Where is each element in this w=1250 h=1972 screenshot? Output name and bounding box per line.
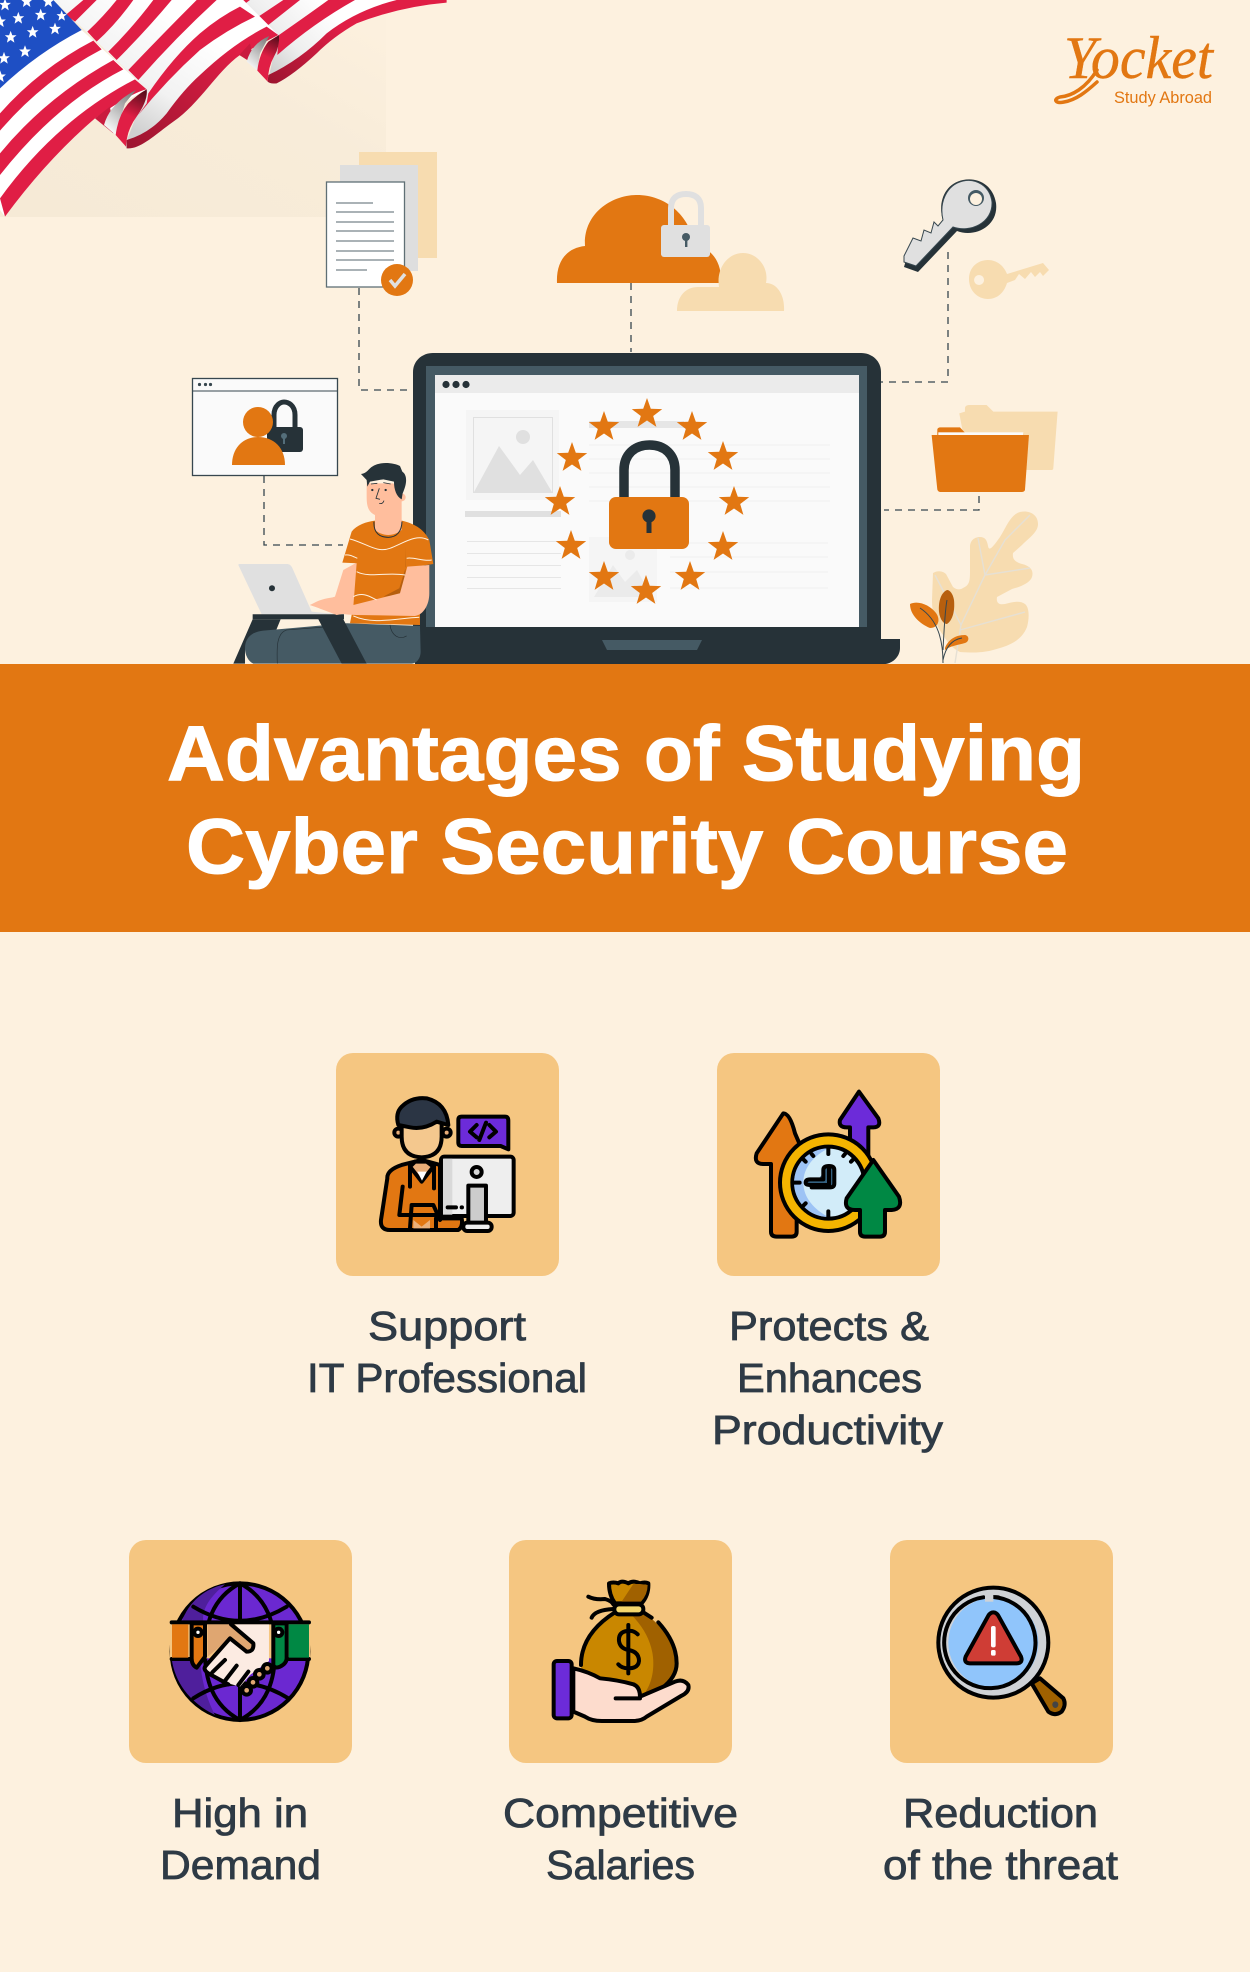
panel: reduction of the threat xyxy=(883,1540,1119,1888)
label: Reduction xyxy=(903,1790,1098,1836)
person with small laptop xyxy=(233,463,433,664)
label: Competitive xyxy=(503,1790,738,1836)
title: Advantages of Studying xyxy=(167,709,1085,797)
label xyxy=(712,1303,944,1453)
icon: key xyxy=(904,179,996,272)
icon: developer at computer xyxy=(381,1098,514,1231)
panel: support IT professional xyxy=(307,1053,587,1401)
connector dashed lines xyxy=(264,252,979,545)
first section xyxy=(0,30,147,217)
label: Demand xyxy=(160,1842,321,1888)
first curl xyxy=(95,107,113,133)
padlock xyxy=(609,445,689,549)
icon: magnifier with warning xyxy=(938,1588,1065,1714)
third section xyxy=(240,0,447,83)
label: Protects & xyxy=(729,1303,929,1349)
laptop with lock and stars xyxy=(413,353,900,664)
second curl xyxy=(239,43,255,65)
label xyxy=(307,1303,587,1401)
label: IT Professional xyxy=(307,1355,587,1401)
screen placeholders xyxy=(465,410,830,602)
second section xyxy=(53,0,278,148)
label: Salaries xyxy=(546,1842,695,1888)
label xyxy=(883,1790,1119,1888)
panel: competitive salaries xyxy=(503,1540,738,1888)
logo: Yocket Study Abroad: Yocket xyxy=(1064,25,1214,91)
icon: money bag on hand xyxy=(554,1582,689,1721)
panel: high in demand xyxy=(129,1540,352,1888)
label: High in xyxy=(172,1790,308,1836)
label: Support xyxy=(368,1303,527,1349)
label xyxy=(160,1790,321,1888)
icon: folders xyxy=(932,405,1058,492)
icon: pale key xyxy=(969,260,1049,299)
icon: user and lock window xyxy=(192,378,338,476)
label: of the threat xyxy=(883,1842,1119,1888)
panel: protects and enhances productivity xyxy=(712,1053,944,1453)
label xyxy=(503,1790,738,1888)
ring of stars xyxy=(545,398,749,604)
title: Cyber Security Course xyxy=(186,802,1068,890)
logo: Yocket Study Abroad: Study Abroad xyxy=(1114,89,1212,107)
icon: waving american flag xyxy=(0,0,447,217)
label: Enhances xyxy=(737,1355,922,1401)
icon: leaves plant xyxy=(910,512,1038,663)
icon: pale cloud xyxy=(677,253,784,311)
title xyxy=(167,709,1085,890)
title banner xyxy=(0,664,1250,932)
icon: documents with check xyxy=(326,152,437,296)
flag shadow xyxy=(0,0,386,217)
icon: handshake over globe xyxy=(170,1583,310,1720)
label: Productivity xyxy=(712,1407,944,1453)
icon: cloud with padlock xyxy=(557,194,721,283)
icon: clock with rising arrows xyxy=(756,1092,900,1237)
